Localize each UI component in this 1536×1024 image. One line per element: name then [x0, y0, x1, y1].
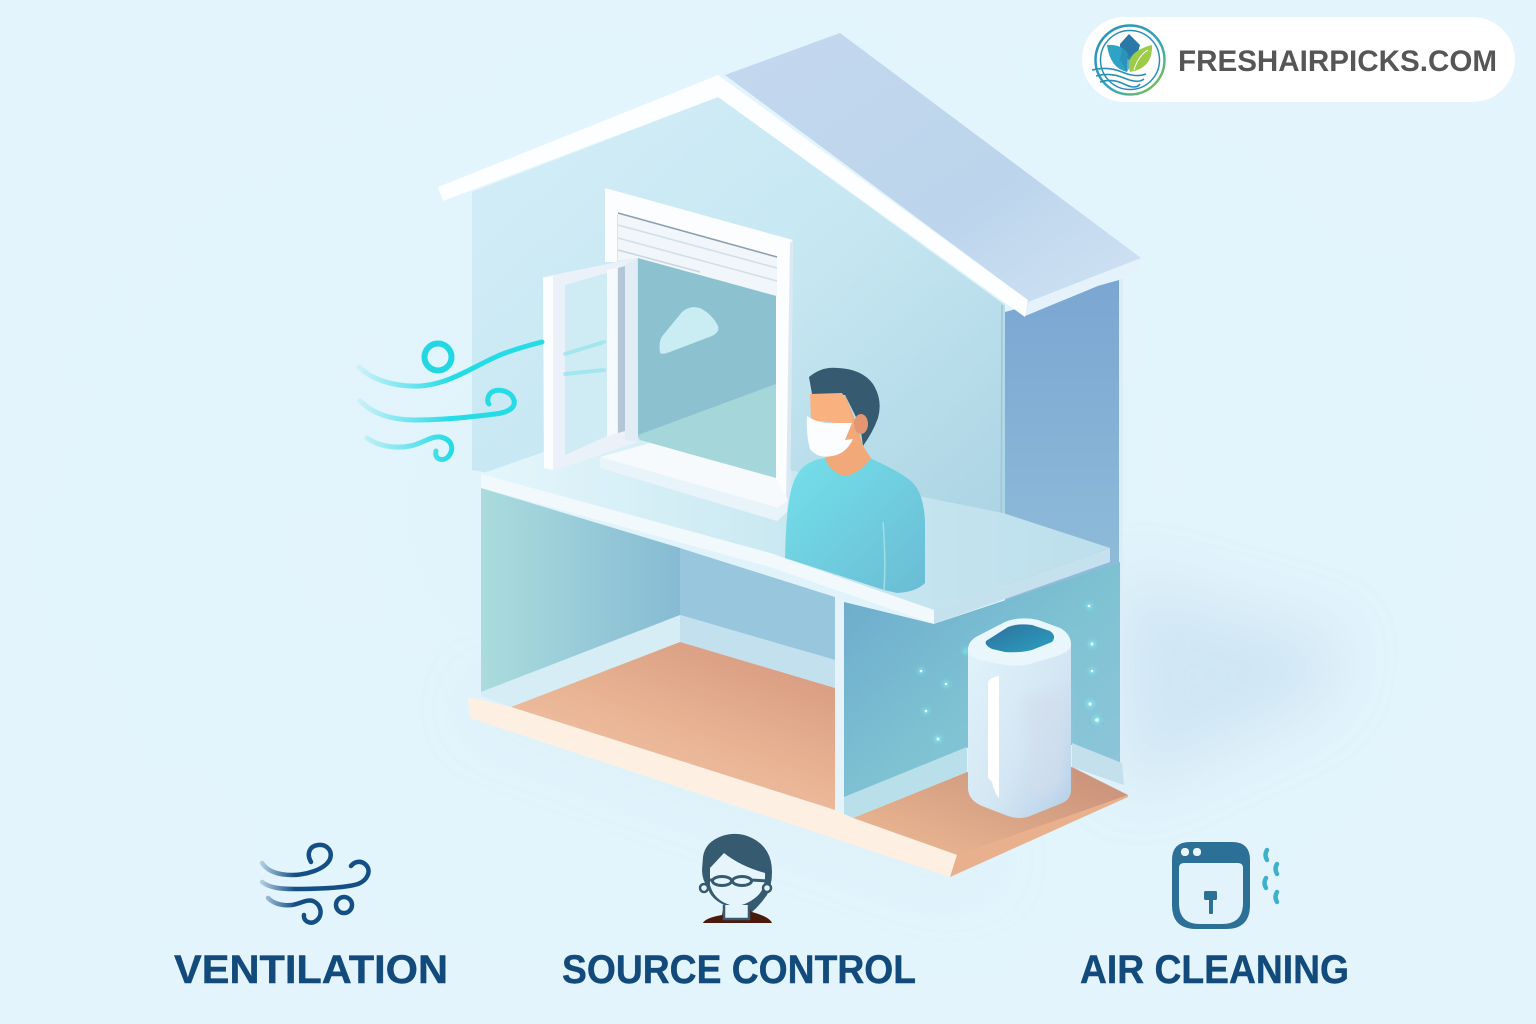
open sash [543, 258, 638, 471]
window sill [600, 443, 788, 521]
person with mask [785, 368, 925, 593]
roof edge [1025, 258, 1141, 316]
site name: FRESHAIRPICKS.COM [1178, 45, 1497, 78]
wind swirls [359, 342, 604, 459]
house illustration [359, 33, 1141, 877]
neck [825, 395, 871, 476]
badge pill [1082, 17, 1515, 102]
back wall [680, 548, 835, 660]
arm fold [883, 522, 885, 590]
icon: masked face [700, 834, 772, 923]
frame shade [786, 240, 793, 505]
face mask [807, 416, 853, 457]
slab left face [481, 474, 934, 624]
window [543, 188, 793, 521]
torso [785, 458, 925, 593]
purifier body [968, 618, 1071, 818]
icon: air drops [1264, 850, 1277, 902]
logo mark [1092, 26, 1164, 94]
right wall [844, 562, 1120, 798]
wall corner line [1001, 305, 1002, 562]
logo badge [1082, 17, 1515, 102]
left baseboard [481, 615, 680, 707]
white eaves [438, 75, 1028, 317]
base slab front [468, 697, 957, 877]
back baseboard [680, 615, 835, 688]
window frame [605, 188, 793, 505]
face [810, 393, 853, 425]
blinds [618, 213, 777, 296]
upper floor slab [481, 432, 1110, 624]
pillar [835, 597, 844, 818]
slab top [481, 432, 1110, 610]
right floor [853, 767, 1128, 868]
side wall [1005, 280, 1119, 772]
base slab corner [950, 795, 1128, 877]
room floor [511, 642, 835, 810]
ventilation column [174, 845, 448, 992]
source control column [562, 834, 916, 992]
hair [809, 368, 880, 446]
upper front wall [472, 97, 1005, 560]
building shadow [470, 580, 1340, 880]
ear [854, 414, 868, 434]
roof plane [725, 33, 1141, 316]
icon: purifier window [1172, 842, 1250, 929]
label: air cleaning: AIR CLEANING [1080, 948, 1349, 992]
air cleaning column [1080, 842, 1349, 992]
outside view [638, 258, 776, 478]
right baseboards [844, 743, 1124, 818]
icon: wind [262, 845, 369, 923]
lower room [468, 488, 1128, 877]
label: ventilation: VENTILATION [174, 948, 448, 992]
side wall edge [1119, 278, 1123, 785]
purifier opening [986, 624, 1054, 652]
cloud [660, 307, 718, 354]
view floor [638, 384, 776, 478]
air purifier [968, 618, 1071, 818]
slab right face [934, 548, 1110, 624]
purifier panel [1024, 686, 1064, 800]
label: source control: SOURCE CONTROL [562, 948, 916, 992]
purifier highlight [988, 676, 999, 798]
air particles [918, 603, 1101, 742]
left wall [481, 488, 680, 692]
purifier rim [968, 618, 1071, 666]
